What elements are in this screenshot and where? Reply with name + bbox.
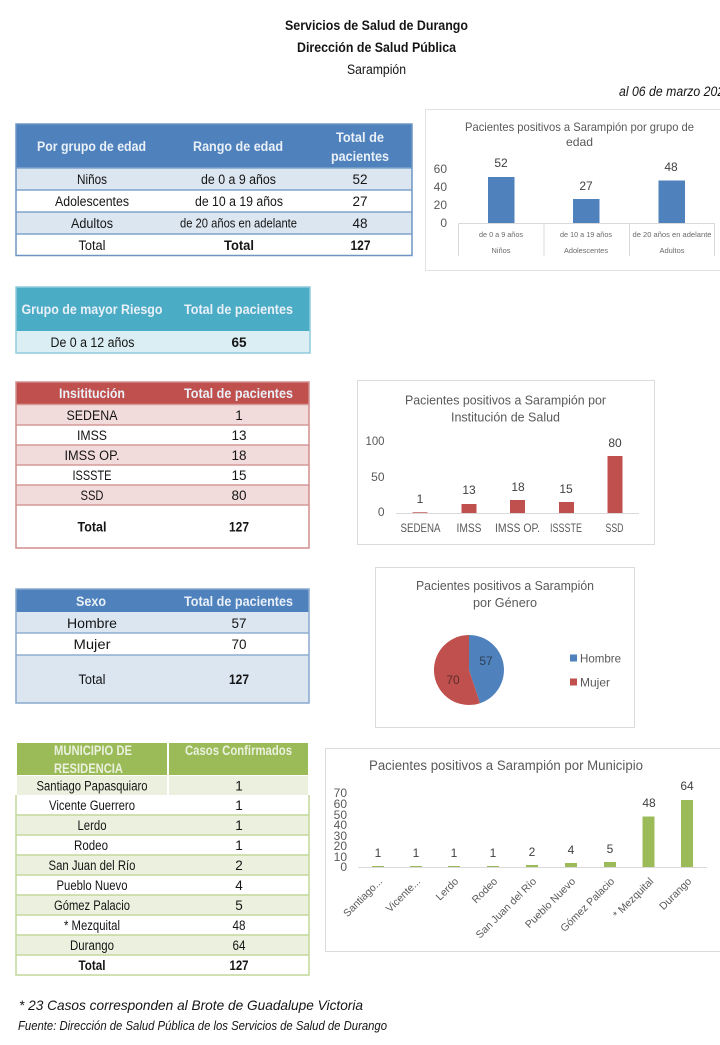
row: Adolescentes: 27 <box>352 194 368 209</box>
chart title: Pacientes positivos a Sarampión por grupo de <box>465 120 694 134</box>
row: Total: 127 <box>229 520 249 534</box>
table header: MUNICIPIO DE <box>54 743 132 758</box>
row: Niños <box>16 168 412 190</box>
row: San Juan del Río: 2 <box>235 858 243 873</box>
y axis labels: 0 <box>440 216 447 230</box>
row: Adultos: Adultos <box>71 216 113 231</box>
row: Niños: 52 <box>352 172 368 187</box>
row: Santiago Papasquiaro: Santiago Papasquiaro <box>36 778 148 794</box>
row: Adultos: 48 <box>352 216 368 231</box>
chart title <box>405 394 606 424</box>
row: Adultos: de 20 años en adelante <box>180 216 297 230</box>
row: SEDENA: SEDENA <box>66 408 118 423</box>
x axis categories: * Mezquital <box>611 876 656 921</box>
row: IMSS: IMSS <box>77 428 107 443</box>
x axis categories <box>479 230 712 255</box>
chart title: por Género <box>473 596 537 610</box>
y axis labels: 50 <box>371 470 385 484</box>
data labels: 5 <box>607 842 614 856</box>
chart title <box>416 579 594 610</box>
row: Total: 127 <box>229 672 249 687</box>
chart title: edad <box>566 135 593 149</box>
data labels <box>417 436 622 506</box>
bars <box>488 177 685 223</box>
row: SEDENA: 1 <box>235 408 243 423</box>
row: San Juan del Río: San Juan del Río <box>48 858 136 873</box>
row: Total: Total <box>78 672 106 687</box>
row: Hombre <box>16 612 309 633</box>
data labels: 27 <box>579 179 593 193</box>
table: municipality <box>16 743 309 975</box>
table header: Grupo de mayor Riesgo <box>22 302 162 317</box>
row: IMSS: 13 <box>231 428 247 443</box>
x axis categories: Adolescentes <box>564 246 608 255</box>
x axis categories: Adultos <box>660 246 685 255</box>
row: Mujer: Mujer <box>74 637 111 652</box>
y axis labels: 100 <box>366 434 385 448</box>
data labels: 1 <box>375 846 382 860</box>
table header <box>17 743 308 776</box>
table header: Insititución <box>59 386 125 401</box>
row: Mezquital <box>16 915 309 935</box>
row: Lerdo <box>16 815 309 835</box>
x axis categories: Lerdo <box>434 876 461 903</box>
y axis labels <box>434 162 447 230</box>
y axis labels: 50 <box>334 808 347 822</box>
table header: Total de pacientes <box>184 594 293 609</box>
data labels: 1 <box>413 846 420 860</box>
x axis categories: IMSS OP. <box>495 521 540 535</box>
heading: organization: Servicios de Salud de Durango <box>285 18 468 33</box>
row: Mujer: 70 <box>231 637 247 652</box>
data labels: 64 <box>680 779 694 793</box>
data labels: 48 <box>642 796 656 810</box>
legend <box>570 652 621 690</box>
legend: Mujer <box>580 676 610 690</box>
y axis labels: 60 <box>434 162 447 176</box>
bars <box>372 800 693 867</box>
table header: Total de pacientes <box>184 386 293 401</box>
x axis categories: SEDENA <box>400 521 440 535</box>
y axis labels <box>334 786 347 874</box>
row: SEDENA <box>16 404 309 425</box>
y axis labels: 70 <box>334 786 347 800</box>
chart title <box>465 120 694 149</box>
x axis categories: Rodeo <box>470 876 500 906</box>
row: Gómez Palacio <box>16 895 309 915</box>
row: Lerdo: 1 <box>235 818 243 833</box>
row: IMSS <box>16 425 309 445</box>
row: Rodeo: Rodeo <box>74 838 108 853</box>
row: Durango: Durango <box>70 938 114 953</box>
table header: Sexo <box>76 594 106 609</box>
x axis categories <box>400 521 624 535</box>
bars <box>412 456 622 513</box>
table: institution <box>16 382 309 548</box>
table header: Casos Confirmados <box>185 743 292 758</box>
row: Total: 127 <box>230 958 248 973</box>
row: SSD <box>16 485 309 505</box>
row: De 0 a 12 años: 65 <box>231 335 247 350</box>
row: Hombre: Hombre <box>67 616 117 631</box>
pie chart: 70 <box>446 673 460 687</box>
row: Total: Total <box>78 958 106 973</box>
row: Gómez Palacio: 5 <box>235 898 243 913</box>
row: Adultos <box>16 212 412 234</box>
chart title: Pacientes positivos a Sarampión por Municipio <box>369 758 643 773</box>
row: Mujer <box>16 633 309 655</box>
data labels: 52 <box>494 156 508 170</box>
pie chart <box>434 635 504 705</box>
data labels: 13 <box>462 483 476 497</box>
y axis labels: 60 <box>334 797 347 811</box>
y axis labels: 30 <box>334 829 347 843</box>
row: Total: Total <box>224 238 254 253</box>
data labels: 4 <box>568 843 575 857</box>
row: Vicente Guerrero: 1 <box>235 798 243 813</box>
row: Niños: de 0 a 9 años <box>201 172 276 187</box>
row: Total: Total <box>78 238 106 253</box>
table header: RESIDENCIA <box>54 761 123 776</box>
table header: pacientes <box>331 149 389 164</box>
table header <box>16 382 309 404</box>
row: Mezquital: 48 <box>232 918 246 933</box>
table: sex <box>16 589 309 703</box>
row: IMSS OP.: IMSS OP. <box>64 448 120 463</box>
data labels: 80 <box>608 436 622 450</box>
y axis labels: 0 <box>340 860 347 874</box>
y axis labels: 10 <box>334 850 347 864</box>
x axis categories: IMSS <box>456 521 482 535</box>
x axis categories: de 20 años en adelante <box>632 230 712 239</box>
title block <box>285 18 468 77</box>
footnote: source: Fuente: Dirección de Salud Pública de los Servicios de Salud de Durango <box>18 1019 387 1033</box>
table header <box>16 124 412 168</box>
row: Lerdo: Lerdo <box>78 818 106 833</box>
row: Santiago Papasquiaro: 1 <box>235 778 243 794</box>
row: Total <box>16 655 309 703</box>
row: Pueblo Nuevo: 4 <box>235 878 243 893</box>
table: age group <box>16 124 412 256</box>
chart title: Pacientes positivos a Sarampión por <box>405 394 606 408</box>
row: Total <box>16 505 309 548</box>
row: IMSS OP. <box>16 445 309 465</box>
x axis categories: Durango <box>657 876 694 913</box>
x axis categories: de 10 a 19 años <box>560 230 612 239</box>
row: ISSSTE: 15 <box>231 468 247 483</box>
row: Gómez Palacio: Gómez Palacio <box>54 898 130 913</box>
chart title: Pacientes positivos a Sarampión <box>416 579 594 593</box>
row: Vicente Guerrero: Vicente Guerrero <box>49 798 135 813</box>
x axis categories <box>341 876 694 941</box>
row: Durango <box>16 935 309 955</box>
table header <box>16 287 310 331</box>
y axis labels: 40 <box>434 180 447 194</box>
table header: Por grupo de edad <box>37 139 146 154</box>
row: Adolescentes <box>16 190 412 212</box>
chart title: Institución de Salud <box>451 410 560 424</box>
x axis categories: de 0 a 9 años <box>479 230 523 239</box>
footnote: outbreak: * 23 Casos corresponden al Brote de Guadalupe Victoria <box>19 997 363 1013</box>
legend: Hombre <box>580 652 621 666</box>
data labels: 15 <box>559 482 573 496</box>
row: Total: Total <box>78 520 106 534</box>
table header: Total de pacientes <box>184 302 293 317</box>
x axis categories: Pueblo Nuevo <box>523 876 578 931</box>
table header: Total de <box>336 130 384 145</box>
pie chart: 57 <box>479 654 493 668</box>
data labels: 18 <box>511 480 525 494</box>
row: Adolescentes: de 10 a 19 años <box>195 194 283 209</box>
x axis categories: Niños <box>492 246 511 255</box>
table: highest risk group <box>16 287 310 353</box>
x axis categories: San Juan del Río <box>474 876 539 941</box>
x axis categories: ISSSTE <box>550 521 582 535</box>
row: ISSSTE: ISSSTE <box>72 468 112 483</box>
heading: subject: Sarampión <box>347 62 406 77</box>
row: Total <box>16 234 412 256</box>
data labels: 48 <box>664 160 678 174</box>
row: Rodeo <box>16 835 309 855</box>
chart: positive patients by age group <box>426 110 720 270</box>
row: IMSS OP.: 18 <box>231 448 247 463</box>
row: San Juan del Río <box>16 855 309 875</box>
row: Total <box>16 955 309 975</box>
row: Niños: Niños <box>77 172 107 187</box>
x axis categories: Vicente... <box>384 876 423 915</box>
row: Vicente Guerrero <box>16 795 309 815</box>
row: Pueblo Nuevo: Pueblo Nuevo <box>56 878 128 893</box>
y axis labels: 20 <box>434 198 447 212</box>
row: Durango: 64 <box>232 938 246 953</box>
row: Total: 127 <box>350 238 370 253</box>
data labels: 1 <box>451 846 458 860</box>
y axis labels: 40 <box>334 818 347 832</box>
row: Mezquital: * Mezquital <box>64 918 120 933</box>
chart: positive patients by gender <box>376 568 634 728</box>
chart: positive patients by institution <box>358 380 654 544</box>
x axis categories: Santiago... <box>341 876 385 920</box>
row: ISSSTE <box>16 465 309 485</box>
y axis labels: 0 <box>378 505 385 519</box>
data labels: 1 <box>490 846 497 860</box>
row: SSD: 80 <box>231 488 247 503</box>
table header <box>16 589 309 612</box>
y axis labels: 20 <box>334 839 347 853</box>
row: Hombre: 57 <box>231 616 247 631</box>
row: De 0 a 12 años: De 0 a 12 años <box>50 335 135 350</box>
data labels <box>375 779 694 860</box>
heading: directorate: Dirección de Salud Pública <box>297 40 456 55</box>
y axis labels <box>366 434 385 519</box>
table header: Rango de edad <box>193 139 283 154</box>
data labels: 2 <box>529 845 536 859</box>
data labels <box>494 156 678 193</box>
row: SSD: SSD <box>80 488 104 503</box>
x axis categories: Gómez Palacio <box>558 876 617 934</box>
row: Pueblo Nuevo <box>16 875 309 895</box>
row: Adolescentes: Adolescentes <box>55 194 129 209</box>
row: De 0 a 12 años <box>16 331 310 353</box>
row: Santiago Papasquiaro <box>17 776 308 795</box>
x axis categories: SSD <box>606 521 624 535</box>
data labels: 1 <box>417 492 424 506</box>
row: Rodeo: 1 <box>235 838 243 853</box>
chart: positive patients by municipality <box>326 748 720 952</box>
